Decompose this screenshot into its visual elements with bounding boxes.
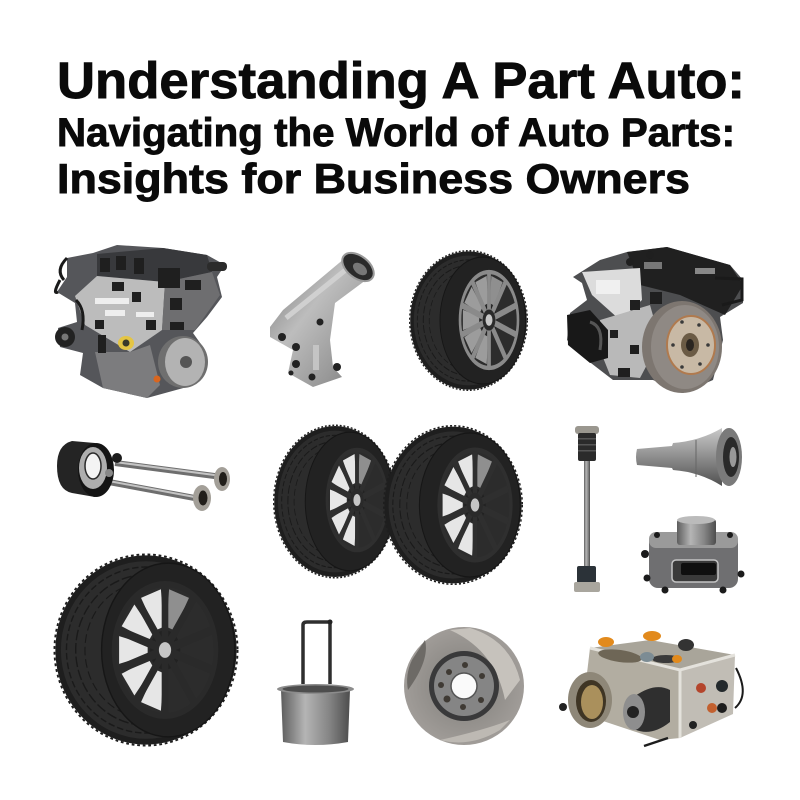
title: Navigating the World of Auto Parts: xyxy=(57,111,735,155)
icon: pair of tires, centre xyxy=(274,425,522,584)
icon: metal pipe fitting xyxy=(270,247,379,387)
icon: cylinder bucket with handle xyxy=(277,620,354,745)
icon: brake disc xyxy=(404,627,524,745)
title: Insights for Business Owners xyxy=(57,155,690,202)
icon: engine block, top left xyxy=(55,245,227,398)
icon: tapered cone part xyxy=(636,428,742,486)
icon: large tire, bottom left xyxy=(54,554,238,746)
icon: vertical shaft xyxy=(574,426,600,592)
icon: tire, top centre xyxy=(410,251,527,390)
icon: roller with two rods xyxy=(57,441,230,511)
icon: engine assembly, bottom right xyxy=(559,631,743,746)
title: Understanding A Part Auto: xyxy=(57,52,745,109)
icon: engine with brake disc, top right xyxy=(567,247,743,393)
title xyxy=(57,52,745,202)
icon: valve block xyxy=(641,516,744,594)
